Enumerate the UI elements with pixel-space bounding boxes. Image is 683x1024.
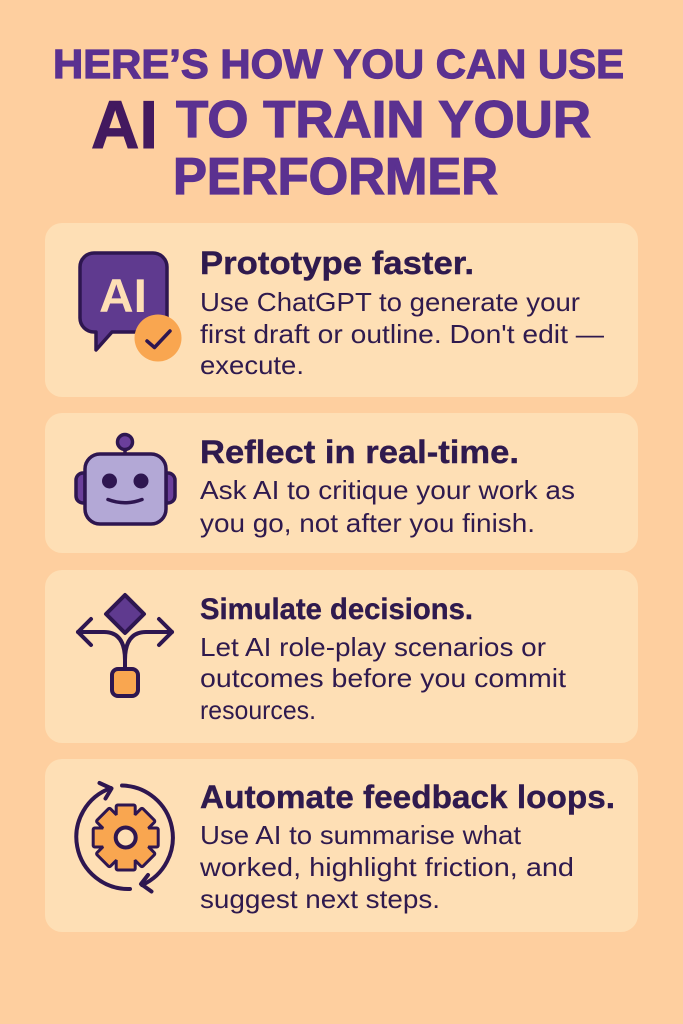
- title: AI: [91, 87, 158, 163]
- text: simulate decisions body: resources.: [200, 695, 316, 725]
- panel: reflect in real-time: [45, 413, 638, 553]
- text: automate feedback loops body: [199, 820, 574, 914]
- title: PERFORMER: [173, 148, 498, 206]
- title: TO TRAIN YOUR: [176, 91, 591, 149]
- heading: automate feedback loops: Automate feedback loops.: [200, 779, 615, 815]
- text: reflect in real-time body: you go, not after you finish.: [200, 508, 535, 538]
- text: reflect in real-time body: [200, 475, 575, 538]
- text: reflect in real-time body: Ask AI to critique your work as: [200, 475, 575, 505]
- icon: gear with cycle arrows: [76, 783, 173, 892]
- text: prototype faster body: first draft or outline. Don't edit —: [200, 319, 604, 349]
- title: [53, 41, 624, 206]
- text: prototype faster body: execute.: [200, 350, 304, 380]
- text: prototype faster body: Use ChatGPT to generate your: [200, 287, 580, 317]
- panel: automate feedback loops: [45, 759, 638, 932]
- panel: simulate decisions: [45, 570, 638, 743]
- text: automate feedback loops body: suggest next steps.: [200, 884, 440, 914]
- text: automate feedback loops body: worked, highlight friction, and: [199, 852, 574, 882]
- heading: prototype faster: Prototype faster.: [200, 245, 474, 281]
- icon: AI speech bubble with check: AI: [99, 269, 147, 322]
- icon: AI speech bubble with check: [80, 253, 182, 362]
- title: HERE’S HOW YOU CAN USE: [53, 41, 624, 87]
- text: simulate decisions body: Let AI role-play scenarios or: [200, 632, 546, 662]
- text: automate feedback loops body: Use AI to summarise what: [200, 820, 522, 850]
- text: simulate decisions body: outcomes before you commit: [200, 663, 567, 693]
- icon: branching decision arrows: [78, 595, 172, 696]
- panel: prototype faster: [45, 223, 638, 397]
- text: simulate decisions body: [200, 632, 567, 725]
- heading: reflect in real-time: Reflect in real-time.: [200, 434, 519, 470]
- heading: simulate decisions: Simulate decisions.: [200, 593, 473, 626]
- text: prototype faster body: [200, 287, 604, 380]
- icon: robot head: [76, 434, 175, 524]
